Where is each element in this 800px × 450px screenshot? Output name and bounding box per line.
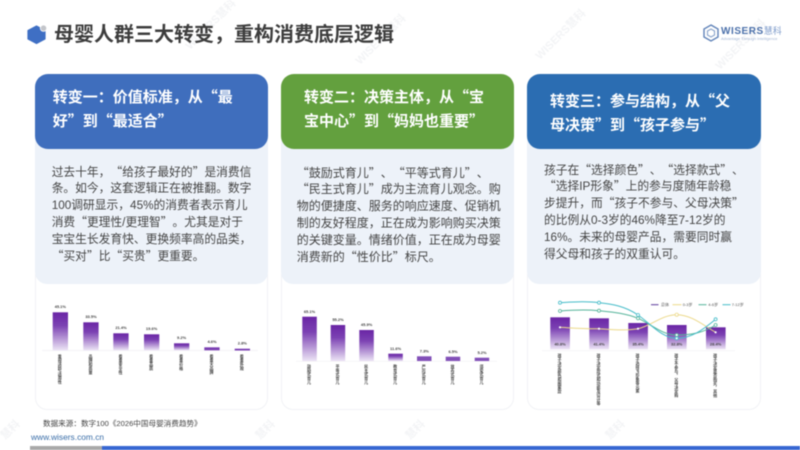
bar chart: parenting values: 65.1%: [304, 309, 316, 314]
text: WISERS慧科: [712, 16, 768, 72]
heading: shift one: 转变一：价值标准，从 最: [53, 89, 233, 106]
text block: shift two: “: [297, 180, 309, 197]
bar chart: values: 4.6%: [207, 339, 217, 344]
icon: title hexagon: [26, 24, 47, 45]
logo: WISERS: WISERS慧科: [721, 26, 782, 37]
text block: shift three: ”: [614, 177, 626, 194]
bar chart: parenting values: 鼓励式育儿: [307, 363, 312, 385]
text block: shift one: ”: [87, 247, 99, 264]
combo chart: child participation: 35.4%: [632, 342, 644, 347]
text: 慧科: [602, 417, 628, 442]
bar chart: parenting values: 民主式育儿: [364, 364, 369, 385]
combo chart: child participation: 孩子决定颜色和图案款: [558, 352, 562, 394]
combo chart: child participation: 孩子决定款式和功能及设计等: [596, 352, 602, 406]
chart panel background one: [35, 274, 268, 410]
text block: shift two: ”: [393, 248, 405, 265]
text block: shift two: 物的便捷度、服务的响应速度、促销机: [297, 199, 501, 213]
combo chart: child participation: 0-3岁: [683, 301, 692, 307]
combo chart: child participation: 7-12岁: [732, 301, 744, 307]
text block: shift one: [52, 162, 252, 264]
text block: shift one: 宝宝生长发育快、更换频率高的品类，: [52, 233, 251, 246]
bar chart: values: 品牌和质量: [88, 354, 94, 375]
text block: shift one: “: [110, 247, 122, 264]
text block: shift one: 消费 更理性/更理智 。尤其是对于: [52, 216, 243, 229]
text: WISERS慧科: [352, 11, 408, 67]
combo chart: child participation: 总体: [661, 301, 669, 307]
text block: shift three: 选择IP形象 上的参与度随年龄稳: [556, 180, 731, 193]
bar chart: values: 看重外观: [240, 353, 245, 371]
heading: shift two: [281, 74, 514, 149]
text block: shift three: 的比例从0-3岁的46%降至7-12岁的: [544, 214, 726, 227]
heading: shift two: “: [379, 110, 394, 131]
bar chart: values: 看重大品牌: [210, 353, 214, 375]
bar chart: values: 看重价格: [179, 353, 184, 371]
heading: shift one: “: [98, 110, 113, 131]
text block: shift three: “: [603, 194, 614, 211]
heading: shift two: ”: [469, 110, 484, 131]
text block: shift three: [544, 160, 744, 261]
bar chart: parenting values: [302, 309, 490, 386]
text block: shift two: 消费新的 性价比 标尺。: [297, 250, 441, 264]
text block: shift two: ”: [369, 164, 381, 180]
bar chart: values: 21.4%: [115, 325, 127, 330]
text block: shift one: ”: [161, 213, 172, 230]
bar chart: values: 19.6%: [146, 326, 158, 331]
bar chart: parenting values: 7.3%: [420, 348, 429, 354]
logo: WISERS: Advantage Through Intelligence: [721, 36, 777, 41]
heading: shift three: 母决策 到 孩子参与: [550, 117, 700, 134]
heading: shift three: [527, 74, 761, 149]
website url: www.wisers.com.cn: [31, 432, 104, 442]
text block: shift three: “: [544, 177, 556, 194]
text block: shift two: 民主式育儿 成为主流育儿观念。购: [309, 182, 501, 196]
combo chart: child participation: 41.4%: [593, 342, 605, 347]
heading: shift three: 转变三：参与结构，从 父: [550, 93, 730, 110]
panel: shift three: [526, 73, 762, 410]
card body background one: [35, 134, 268, 284]
text block: shift two: 制的友好程度，正在成为影响购买决策: [297, 216, 501, 230]
text block: shift one: “: [110, 162, 122, 180]
text block: shift one: 条。如今，这套逻辑正在被推翻。数字: [52, 182, 251, 195]
combo chart: child participation: [550, 300, 744, 406]
panel: shift one: [34, 73, 269, 410]
heading: shift one: ”: [158, 110, 173, 131]
panel: shift two: [280, 73, 515, 410]
text block: shift one: “: [52, 247, 63, 264]
heading: shift one: 好 到 最适合: [53, 113, 158, 130]
heading: shift three: ”: [595, 114, 610, 135]
combo chart: child participation: 孩子不参与，父母决定购: [674, 352, 679, 398]
bar chart: values: 看重品质: [149, 353, 154, 371]
text block: shift one: 过去十年， 给孩子最好的 是消费信: [52, 166, 251, 178]
text block: shift three: 孩子在 选择颜色 、 选择款式 、: [544, 164, 744, 176]
text block: shift two: [296, 164, 502, 265]
text block: shift one: ”: [193, 162, 204, 180]
text block: shift three: “: [579, 160, 591, 178]
text block: shift three: 16%。未来的母婴产品，需要同时赢: [544, 231, 732, 244]
bar chart: values: 9.2%: [177, 335, 187, 340]
footer bar: [30, 446, 800, 450]
bar chart: parenting values: 严厉式育儿: [422, 364, 427, 385]
text block: shift two: ”: [465, 164, 477, 180]
text block: shift one: “: [75, 213, 87, 230]
card body background two: [281, 134, 514, 284]
bar chart: parenting values: 教育式育儿: [393, 363, 398, 385]
bar chart: values: 45.1%: [55, 304, 66, 309]
text block: shift two: “: [297, 164, 309, 180]
heading: shift three: ”: [700, 114, 715, 135]
text block: shift one: 买对 比 买贵 更重要。: [63, 250, 204, 263]
combo chart: child participation: 孩子选择IP形象等元素: [636, 352, 640, 394]
heading: shift one: [35, 74, 268, 149]
heading: shift one: “: [203, 86, 218, 107]
heading: shift two: 宝中心 到 妈妈也重要: [304, 113, 469, 130]
text block: shift one: ”: [146, 247, 157, 264]
text block: shift two: 鼓励式育儿 、 平等式育儿 、: [309, 166, 489, 180]
text block: shift three: ”: [720, 160, 732, 178]
title: 母婴人群三大转变，重构消费底层逻辑: [54, 24, 394, 46]
text: 慧科: [252, 417, 278, 442]
heading: shift two: “: [454, 86, 469, 107]
text block: shift three: “: [662, 160, 673, 178]
chart panel background two: [281, 274, 514, 410]
combo chart: child participation: 28.4%: [710, 342, 722, 347]
chart panel background three: [527, 274, 761, 410]
bar chart: parenting values: 放养式育儿: [450, 363, 456, 385]
bar chart: parenting values: 5.2%: [477, 350, 487, 355]
text block: shift three: ”: [732, 194, 744, 211]
text block: shift two: 的关键变量。情绪价值，正在成为母婴: [297, 233, 501, 247]
bar chart: values: 2.8%: [238, 340, 247, 345]
text block: shift two: ”: [369, 180, 381, 197]
logo: WISERS: [702, 24, 782, 42]
bar chart: parenting values: 11.6%: [390, 346, 402, 351]
text: WISERS慧科: [532, 6, 588, 62]
text block: shift three: 步提升，而 孩子不参与、父母决策: [544, 197, 732, 210]
heading: shift one: ”: [68, 110, 83, 131]
bar chart: parenting values: 45.9%: [361, 322, 373, 327]
bar chart: parenting values: 溺爱式育儿: [480, 363, 484, 385]
source note: 数据来源：数字100《2026中国母婴消费趋势》: [43, 419, 202, 428]
bar chart: parenting values: 平等式育儿: [336, 364, 340, 385]
text block: shift one: 100调研显示，45%的消费者表示育儿: [52, 199, 248, 212]
text block: shift three: ”: [638, 160, 650, 178]
bar chart: values: 看重安全性: [118, 353, 124, 375]
text block: shift three: 得父母和孩子的双重认可。: [544, 248, 685, 261]
text block: shift two: “: [345, 248, 357, 265]
combo chart: child participation: 40.8%: [554, 342, 566, 347]
heading: shift three: “: [700, 90, 715, 111]
heading: shift three: “: [625, 114, 640, 135]
text: 慧科: [402, 417, 428, 442]
bar chart: values: 33.5%: [85, 314, 97, 319]
combo chart: child participation: 孩子决定是否购买，其他: [713, 352, 718, 398]
bar chart: values: [52, 304, 251, 385]
combo chart: child participation: 32.8%: [671, 342, 683, 347]
text block: shift two: “: [393, 164, 405, 180]
heading: shift two: ”: [349, 110, 364, 131]
combo chart: child participation: 4-6岁: [708, 301, 718, 307]
bar chart: values: 重视适龄/适用性: [58, 353, 63, 384]
bar chart: parenting values: 55.2%: [332, 317, 344, 322]
bar chart: parenting values: 6.5%: [448, 349, 458, 354]
heading: shift two: 转变二：决策主体，从 宝: [304, 89, 484, 106]
card body background three: [527, 134, 761, 284]
